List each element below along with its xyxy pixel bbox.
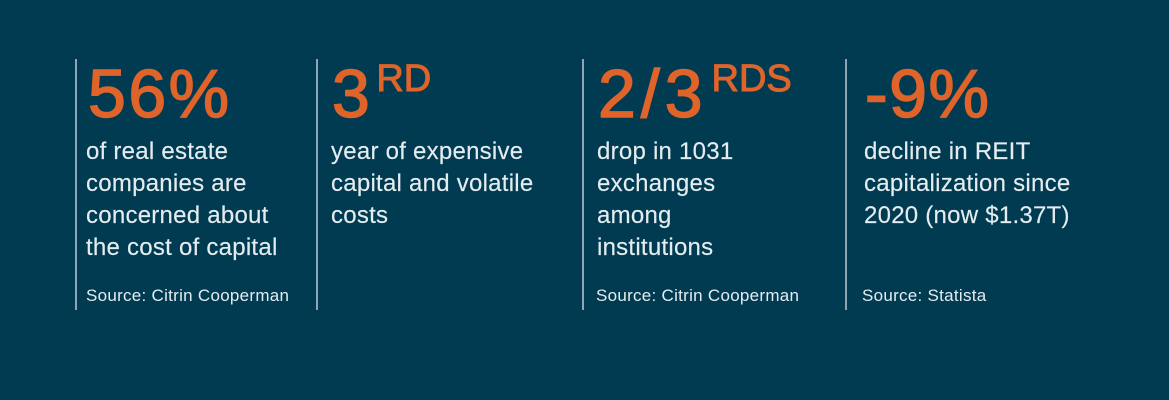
big number: 2/3RDS: 2/3RDS — [598, 56, 792, 132]
panel: stat 56% — [75, 56, 289, 310]
description: 56%: concerned about — [86, 202, 269, 229]
description: 2/3rds: drop in 1031 — [597, 138, 733, 164]
description: -9%: 2020 (now $1.37T) — [864, 202, 1070, 229]
description: 56%: the cost of capital — [86, 234, 278, 261]
source: Statista: Source: Statista — [862, 286, 986, 304]
big number: 3RD: 3RD — [332, 56, 431, 132]
big number: 56%: 56% — [88, 56, 232, 132]
description: 2/3rds: among — [597, 202, 672, 229]
description: 3rd: year of expensive — [331, 138, 523, 164]
panel: stat 3rd — [316, 56, 533, 310]
description: 3rd: capital and volatile — [331, 170, 533, 197]
description: -9%: capitalization since — [864, 170, 1070, 197]
big number: -9%: -9% — [865, 56, 990, 132]
description: 2/3rds: exchanges — [597, 170, 715, 197]
description: -9% — [864, 138, 1070, 229]
description: 2/3rds — [597, 138, 733, 261]
description: 56%: companies are — [86, 170, 247, 197]
source: Citrin Cooperman: Source: Citrin Cooperman — [86, 286, 289, 304]
description: 3rd: costs — [331, 202, 388, 229]
description: -9%: decline in REIT — [864, 138, 1030, 164]
description: 3rd — [331, 138, 533, 229]
panel: stat 2/3rds — [582, 56, 799, 310]
description: 56% — [86, 138, 278, 261]
source: Citrin Cooperman: Source: Citrin Cooperman — [596, 286, 799, 304]
description: 2/3rds: institutions — [597, 234, 713, 261]
panel: stat -9% — [845, 56, 1070, 310]
description: 56%: of real estate — [86, 138, 228, 164]
